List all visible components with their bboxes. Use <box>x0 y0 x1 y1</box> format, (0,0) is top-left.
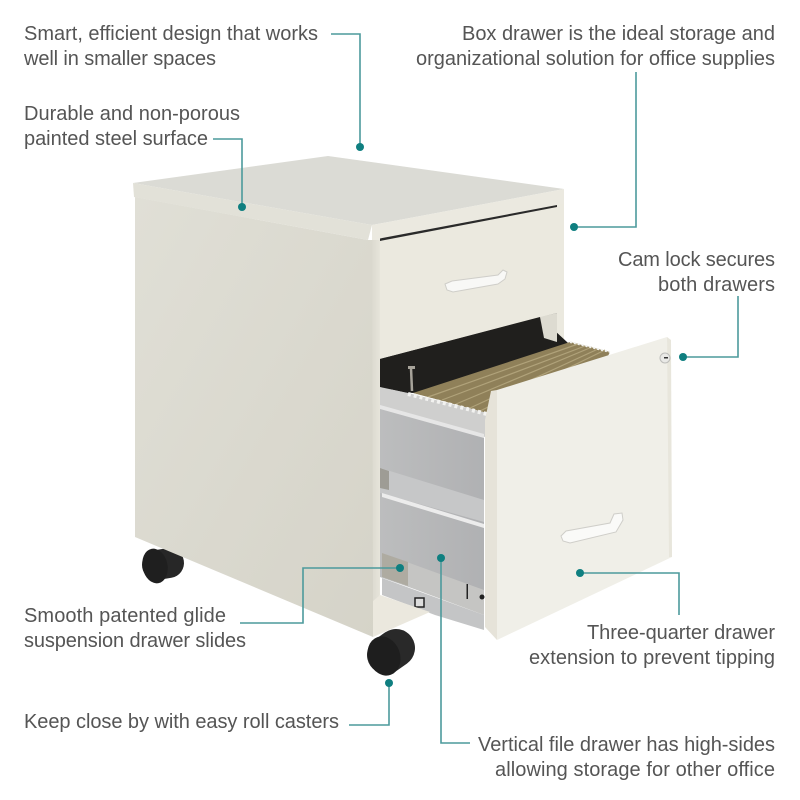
callout: cam lock: both drawers <box>658 274 775 296</box>
open drawer gray side <box>380 387 487 630</box>
hanging file folders <box>413 342 610 413</box>
cabinet side panel <box>135 197 380 637</box>
callout: box drawer <box>416 23 775 231</box>
callout: smart design <box>23 23 364 151</box>
callout: glide suspension: suspension drawer slides <box>24 630 246 652</box>
callout: roll casters: Keep close by with easy roll casters <box>24 711 339 733</box>
callout: box drawer: Box drawer is the ideal storage and <box>462 23 775 45</box>
callout: steel surface: Durable and non-porous <box>24 103 240 125</box>
callout: vertical file drawer <box>437 554 775 781</box>
callout: glide suspension: Smooth patented glide <box>24 605 226 627</box>
icon: lower drawer handle <box>561 513 623 543</box>
file cabinet illustration <box>133 156 672 680</box>
open drawer front panel <box>485 337 672 640</box>
icon: front caster <box>362 632 406 680</box>
callout: vertical file drawer: allowing storage for other office <box>495 759 775 781</box>
callout: three-quarter extension: Three-quarter drawer <box>587 622 775 644</box>
callout: glide suspension <box>24 564 404 652</box>
callout: three-quarter extension: extension to prevent tipping <box>529 647 775 669</box>
callout: roll casters <box>24 679 393 733</box>
icon: back caster <box>139 546 171 586</box>
cabinet top <box>133 156 564 240</box>
callout: smart design: well in smaller spaces <box>23 48 216 70</box>
callout: box drawer: organizational solution for office supplies <box>416 48 775 70</box>
callout: cam lock: Cam lock secures <box>618 249 775 271</box>
icon: top drawer handle <box>445 270 507 292</box>
top drawer <box>380 205 557 359</box>
drawer opening interior <box>380 313 570 393</box>
callout: cam lock <box>618 249 775 361</box>
icon: lock <box>660 353 670 363</box>
icon: slide slot <box>415 598 424 607</box>
callout: three-quarter extension <box>529 569 775 669</box>
cabinet base corner <box>373 595 430 637</box>
callout: smart design: Smart, efficient design that works <box>24 23 318 45</box>
callout: vertical file drawer: Vertical file drawer has high-sides <box>478 734 775 756</box>
cabinet left front strip <box>372 240 380 601</box>
callout: steel surface <box>24 103 246 211</box>
callout: steel surface: painted steel surface <box>24 128 208 150</box>
cabinet front frame <box>380 198 564 345</box>
icon: drawer pin <box>408 366 415 391</box>
